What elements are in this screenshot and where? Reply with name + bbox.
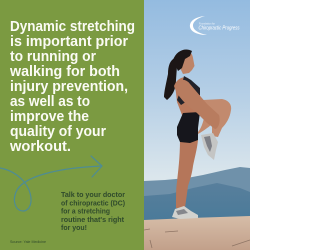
standing shoe xyxy=(172,206,198,219)
runner xyxy=(164,49,231,219)
panel: green background xyxy=(0,0,144,250)
raised shoe xyxy=(201,133,218,160)
source note: Source: Yale Medicine xyxy=(10,240,46,244)
logo xyxy=(190,16,240,35)
heading: walking for both xyxy=(9,63,120,80)
call to action text: for you! xyxy=(61,225,87,232)
heading: workout. xyxy=(9,138,71,155)
heading xyxy=(9,18,135,155)
ponytail xyxy=(164,58,177,100)
heading: as well as to xyxy=(10,93,90,110)
shorts xyxy=(177,112,200,143)
call to action text xyxy=(61,192,125,232)
heading: Dynamic stretching xyxy=(10,18,135,35)
logo crescent xyxy=(190,16,207,35)
call to action text: routine that's right xyxy=(61,217,125,224)
arrow: looping blue arrow xyxy=(0,156,102,211)
standing leg xyxy=(176,140,198,208)
call to action text: Talk to your doctor xyxy=(61,192,125,199)
sports bra xyxy=(177,76,200,105)
mountains xyxy=(144,167,250,222)
heading: improve the xyxy=(10,108,89,125)
logo text: Foundation for xyxy=(199,22,215,26)
photo: stretching runner on mountain xyxy=(144,0,250,250)
heading: to running or xyxy=(10,48,96,65)
hair xyxy=(173,49,192,71)
raised thigh and shin xyxy=(198,99,231,137)
heading: quality of your xyxy=(10,123,106,140)
arm xyxy=(174,80,220,129)
sky xyxy=(144,0,250,222)
logo name: Chiropractic Progress xyxy=(198,26,240,32)
head xyxy=(180,51,194,74)
call to action text: of chiropractic (DC) xyxy=(61,200,125,207)
call to action text: for a stretching xyxy=(61,209,110,216)
heading: is important prior xyxy=(10,33,128,50)
torso xyxy=(175,77,200,115)
rock ground xyxy=(144,216,250,250)
heading: injury prevention, xyxy=(10,78,128,95)
